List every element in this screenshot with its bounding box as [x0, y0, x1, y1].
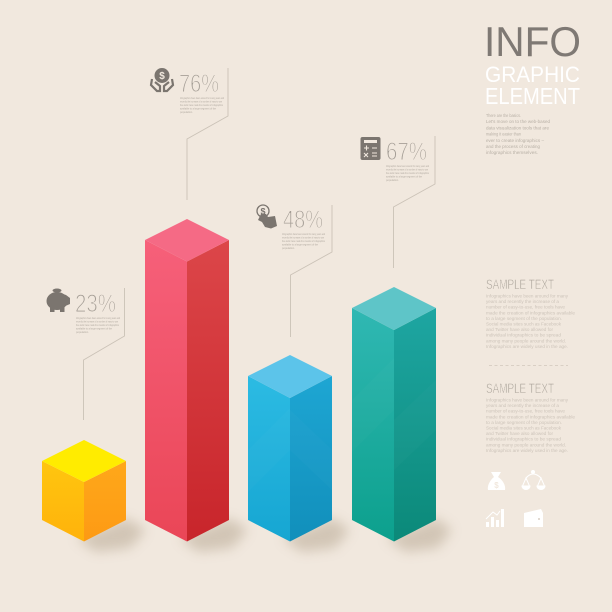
body text 1: among many people around the world. [486, 338, 566, 344]
bar: teal 67% [352, 287, 436, 542]
intro text: infographics themselves. [486, 150, 538, 156]
icon: hands holding dollar coin: $ [159, 71, 165, 82]
body text 2: among many people around the world. [486, 442, 566, 448]
leader line: 67% [394, 136, 435, 268]
description: 23%: Infographics have been around for many years and [76, 316, 120, 320]
divider [489, 364, 568, 366]
heading: sample text 1: SAMPLE TEXT [486, 276, 554, 292]
icon: wallet [524, 509, 543, 527]
description: 67%: population. [386, 178, 399, 182]
body text 1: individual infographics to be spread [486, 333, 561, 339]
description: 76%: Infographics have been around for many years and [180, 96, 224, 100]
description: 67% [386, 164, 429, 182]
bar shadows [76, 518, 452, 552]
description: 48%: Infographics have been around for many years and [282, 232, 325, 236]
body text 2: to a large segment of the population. [486, 420, 562, 426]
icon: money bag: $ [494, 481, 499, 490]
icon: money bag [488, 472, 505, 490]
bar: red 76% [145, 219, 229, 542]
intro text: There are the basics. [486, 113, 521, 119]
body text 2: Infographics have been around for many [486, 398, 569, 404]
body text 1: and Twitter have also allowed for [486, 327, 553, 333]
description: 23%: free tools have made the creation of infographics [76, 323, 119, 327]
body text 2: individual infographics to be spread [486, 437, 561, 443]
body text 1: Infographics have been around for many [486, 294, 569, 300]
percentage: 48%: 48% [283, 206, 323, 234]
description: 48%: free tools have made the creation of infographics [282, 239, 325, 243]
intro text: ever to create infographics – [486, 138, 544, 144]
description: 67%: available to a large segment of the [386, 174, 422, 178]
description: 67%: Infographics have been around for many years and [386, 164, 429, 168]
percentage: 76%: 76% [179, 70, 219, 98]
body text 1: years and recently the increase of a [486, 299, 559, 305]
body text 1 [486, 294, 575, 350]
body text 1: Social media sites such as Facebook [486, 322, 562, 328]
description: 23% [76, 316, 120, 334]
body text 1: made the creation of infographics available [486, 310, 575, 316]
icon: finger pressing dollar coin [257, 205, 277, 228]
description: 48%: population. [282, 246, 295, 250]
body text 1: number of easy-to-use, free tools have [486, 305, 565, 311]
body text 2: years and recently the increase of a [486, 403, 559, 409]
body text 1: Infographics are widely used in the age. [486, 344, 568, 350]
leader line: 76% [187, 68, 228, 200]
percentage: 67%: 67% [386, 138, 427, 166]
icon: bar chart with arrow [486, 509, 504, 527]
description: 67%: free tools have made the creation of infographics [386, 171, 429, 175]
percentage: 23%: 23% [75, 290, 116, 318]
intro text: making it easier than [486, 132, 521, 138]
description: 67%: recently the increase of a number of easy-to-use [386, 168, 428, 172]
bar: yellow 23% [42, 440, 126, 542]
description: 48%: recently the increase of a number of easy-to-use [282, 236, 324, 240]
description: 76%: free tools have made the creation of infographics [180, 103, 223, 107]
description: 23%: recently the increase of a number of easy-to-use [76, 320, 118, 324]
description: 76%: available to a large segment of the [180, 106, 216, 110]
body text 2: made the creation of infographics available [486, 414, 575, 420]
bar: blue 48% [248, 355, 332, 542]
title: ELEMENT: ELEMENT [485, 83, 580, 109]
description: 23%: population. [76, 330, 89, 334]
intro text [486, 113, 550, 156]
description: 23%: available to a large segment of the [76, 326, 112, 330]
body text 1: to a large segment of the population. [486, 316, 562, 322]
description: 76%: recently the increase of a number of easy-to-use [180, 100, 222, 104]
icon: piggy bank [46, 288, 70, 312]
title: GRAPHIC: GRAPHIC [485, 62, 580, 87]
icon: balance scale [522, 470, 545, 490]
icon: finger pressing dollar coin: $ [260, 206, 266, 216]
body text 2: number of easy-to-use, free tools have [486, 409, 565, 415]
description: 76%: population. [180, 110, 193, 114]
intro text: data visualization tools that are [486, 125, 549, 131]
title: INFO: INFO [484, 18, 581, 65]
intro text: and the process of creating [486, 144, 540, 150]
leader line: 23% [84, 288, 124, 420]
icon: hands holding dollar coin [151, 68, 173, 91]
heading: sample text 2: SAMPLE TEXT [486, 380, 554, 396]
leader line: 48% [290, 205, 332, 337]
icon: calculator [360, 137, 380, 160]
intro text: Let's move on to the web-based [486, 119, 550, 125]
body text 2: Social media sites such as Facebook [486, 426, 562, 432]
body text 2: Infographics are widely used in the age. [486, 448, 568, 454]
body text 2: and Twitter have also allowed for [486, 431, 553, 437]
description: 48% [282, 232, 325, 250]
description: 48%: available to a large segment of the [282, 242, 318, 246]
description: 76% [180, 96, 224, 114]
body text 2 [486, 398, 575, 454]
